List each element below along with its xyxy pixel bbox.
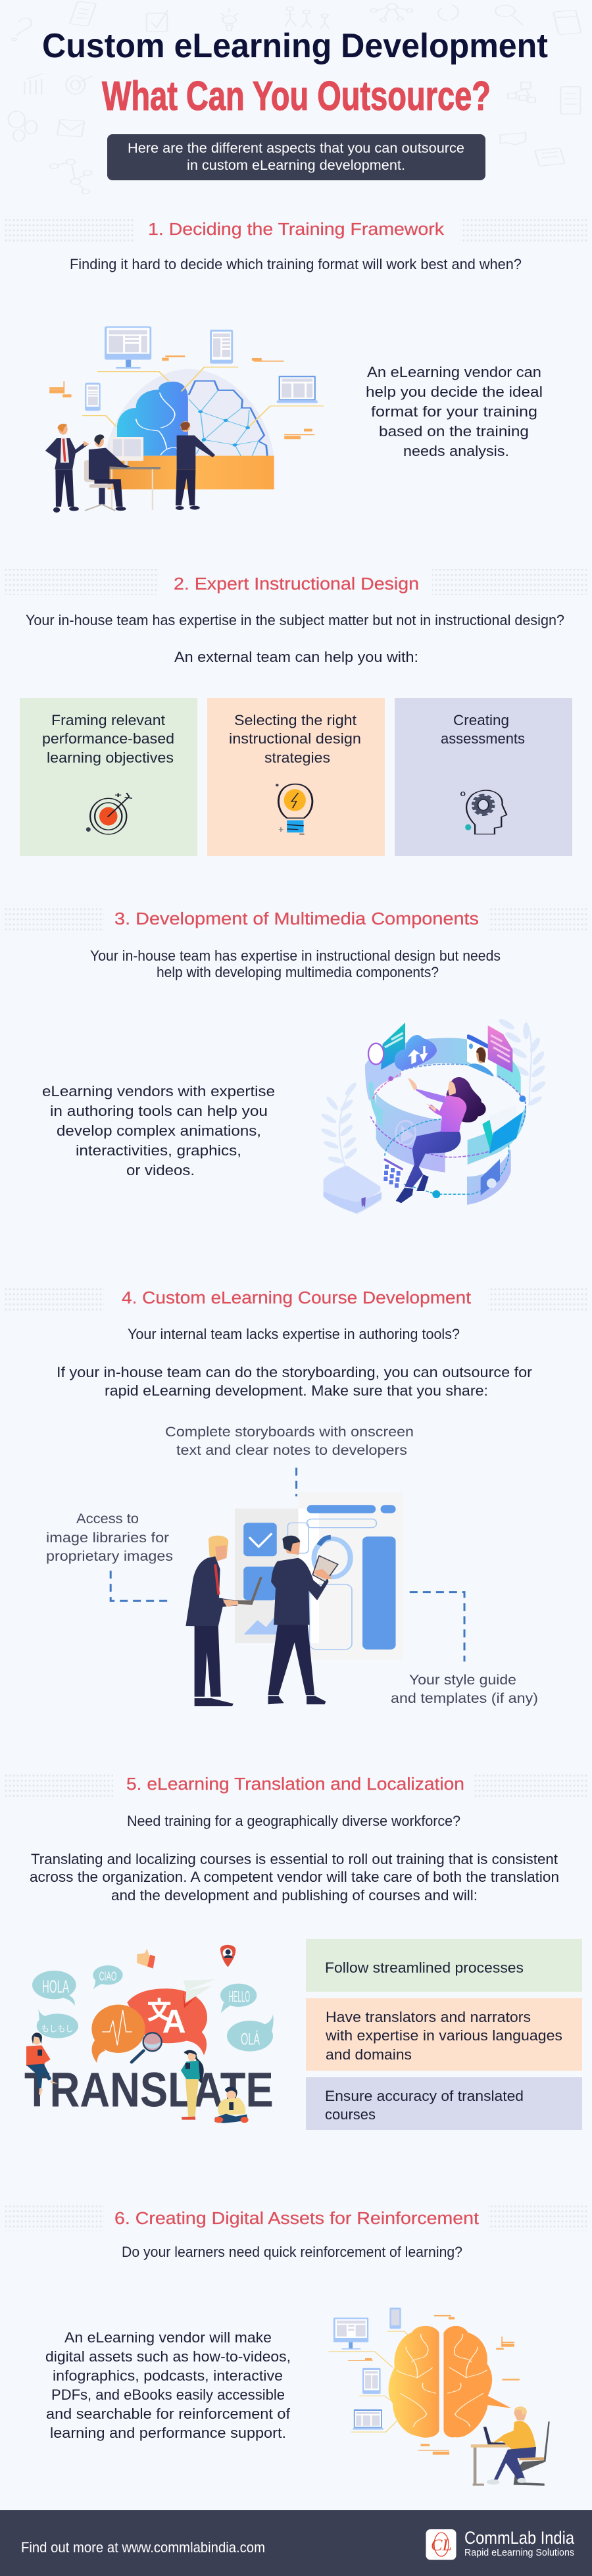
logo: CommLab India [426,2528,575,2560]
card: learning objectives: Framing relevant [51,712,165,728]
section 1 heading: 1. Deciding the Training Framework [148,220,444,239]
section 5 heading: 5. eLearning Translation and Localization [126,1775,464,1794]
card: instructional strategies [207,698,385,856]
section 1 heading [5,216,587,241]
section 1 question: Finding it hard to decide which training format will work best and when? [70,256,522,272]
section 3 explanation text: develop complex animations, [57,1123,261,1139]
section 6 explanation text [45,2329,291,2441]
callout: storyboards: text and clear notes to developers [176,1443,407,1458]
callout: storyboards [165,1425,414,1458]
translate symbol: A [162,2003,186,2040]
section 1 explanation text: An eLearning vendor can [367,364,541,380]
footer link text: Find out more at www.commlabindia.com [21,2539,265,2556]
section 1 explanation text: format for your training [371,403,537,420]
speech bubble: hello: HELLO [229,1988,250,2006]
section 3 explanation text: interactivities, graphics, [76,1142,241,1159]
section 5 explanation text: Translating and localizing courses is essential to roll out training that is consistent [31,1851,558,1867]
section 3 explanation text: in authoring tools can help you [50,1103,268,1119]
section 5 question: Need training for a geographically diverse workforce? [127,1813,460,1829]
section 6 explanation text: PDFs, and eBooks easily accessible [51,2387,285,2403]
section 6 explanation text: learning and performance support. [50,2425,286,2441]
callout: image libraries: image libraries for [46,1530,169,1546]
card: assessments: assessments [441,730,525,747]
section 5 explanation text [30,1851,559,1904]
section 2 question: Your in-house team has expertise in the subject matter but not in instructional design? [26,612,564,628]
section 6 explanation text: An eLearning vendor will make [64,2329,272,2346]
logo: CommLab India: CommLab India [464,2528,575,2548]
section 1 explanation text [366,364,543,459]
box: translators and narrators: Have translators and narrators [326,2009,531,2025]
section 3 question: help with developing multimedia components? [157,964,439,980]
card: learning objectives: learning objectives [47,749,174,766]
translate symbol [147,1990,186,2040]
card: instructional strategies: Selecting the right [234,712,357,728]
callout: style guide: Your style guide [409,1673,516,1688]
title: Custom eLearning Development [42,27,548,65]
speech bubble: ciao: CIAO [99,1970,116,1984]
section 6 explanation text: digital assets such as how-to-videos, [45,2348,291,2365]
section 3 question [90,947,501,980]
illustration: translate speech bubbles and people [24,1945,274,2123]
callout: image libraries: Access to [76,1511,139,1527]
person: woman standing [181,2050,204,2120]
icon: light bulb [276,784,312,834]
section 4 explanation text: If your in-house team can do the storyboarding, you can outsource for [57,1364,532,1380]
logo: CommLab India: Rapid eLearning Solutions [464,2547,574,2558]
section 5 heading [5,1773,587,1799]
section 3 explanation text: eLearning vendors with expertise [42,1083,275,1099]
section 3 heading: 3. Development of Multimedia Components [114,910,479,928]
box: translators and narrators: with expertise in various languages [325,2027,562,2044]
speech bubble: moshi moshi [37,2009,78,2038]
footer bar [0,2510,592,2576]
person: man seated [214,2086,249,2123]
section 1 explanation text: help you decide the ideal [366,384,543,400]
section 4 explanation text: rapid eLearning development. Make sure that you share: [105,1382,488,1399]
callout: storyboards: Complete storyboards with onscreen [165,1425,414,1440]
speech bubble: hola: HOLA [42,1976,69,1996]
translate symbol: 文 [147,1990,172,2026]
callout: image libraries: proprietary images [46,1549,173,1564]
section 3 explanation text: or videos. [126,1162,195,1178]
illustration: brain, devices and learner [328,2308,550,2486]
box: accuracy [306,2077,582,2130]
logo: CommLab India: CL [431,2537,452,2554]
speech bubble: moshi moshi: もしもし [41,2022,74,2034]
card: instructional strategies: strategies [264,749,330,766]
callout connector: right [410,1592,464,1661]
section 6 heading [5,2206,587,2231]
section 4 heading: 4. Custom eLearning Course Development [122,1289,471,1307]
card: assessments: Creating [453,712,509,728]
section 3 question: Your in-house team has expertise in instructional design but needs [90,947,501,964]
section 2 heading [5,569,587,595]
section 2 heading: 2. Expert Instructional Design [174,575,419,593]
section 4 explanation text [57,1364,532,1399]
background doodle icons [9,1,581,193]
section 6 question: Do your learners need quick reinforcement of learning? [122,2244,462,2260]
section 5 explanation text: across the organization. A competent vendor will take care of both the translation [30,1869,559,1885]
word: translate: TRANSLATE [24,2063,274,2117]
section 2 lead-in: An external team can help you with: [174,649,418,665]
illustration: two men in front of screens [111,1468,464,1706]
section 3 heading [5,905,587,930]
speech bubble: ola: OLÁ [241,2030,260,2049]
box: accuracy: Ensure accuracy of translated [325,2088,524,2104]
icon: target [86,793,132,834]
box: translators and narrators: and domains [326,2046,412,2063]
callout: style guide: and templates (if any) [391,1691,538,1706]
section 6 heading: 6. Creating Digital Assets for Reinforcement [114,2210,479,2228]
section 1 explanation text: needs analysis. [403,443,509,459]
intro banner: Here are the different aspects that you can outsource [128,141,464,156]
person: woman seated left [26,2033,57,2096]
callout connector: left [111,1571,169,1601]
section 6 explanation text: infographics, podcasts, interactive [53,2367,283,2384]
speech bubble: ciao [93,1965,123,1989]
box: translators and narrators [306,1998,582,2071]
icon: head with gear [461,790,506,834]
box: streamlined processes: Follow streamlined processes [325,1959,524,1976]
intro banner: in custom eLearning development. [187,158,405,173]
intro banner [107,134,485,180]
illustration: team, cloud brain and devices [45,326,324,513]
speech bubble: hola [32,1971,76,2006]
card: assessments [395,698,572,856]
section 3 explanation text [42,1083,275,1178]
speech bubble: hello [220,1984,257,2013]
callout connector: top [295,1468,297,1496]
speech bubble: ola [227,2015,274,2052]
card: learning objectives: performance-based [42,730,174,747]
section 4 heading [5,1285,587,1311]
box: streamlined processes [306,1939,582,1992]
section 1 explanation text: based on the training [379,423,529,440]
callout: image libraries [46,1511,173,1564]
section 5 explanation text: and the development and publishing of courses and will: [111,1887,478,1904]
card: instructional strategies: instructional design [229,730,361,747]
card: learning objectives [20,698,197,856]
illustration: woman with multimedia ring [320,1017,547,1215]
section 4 question: Your internal team lacks expertise in authoring tools? [128,1326,460,1342]
box: accuracy: courses [325,2106,376,2123]
callout: style guide [391,1673,538,1706]
section 6 explanation text: and searchable for reinforcement of [46,2406,291,2422]
